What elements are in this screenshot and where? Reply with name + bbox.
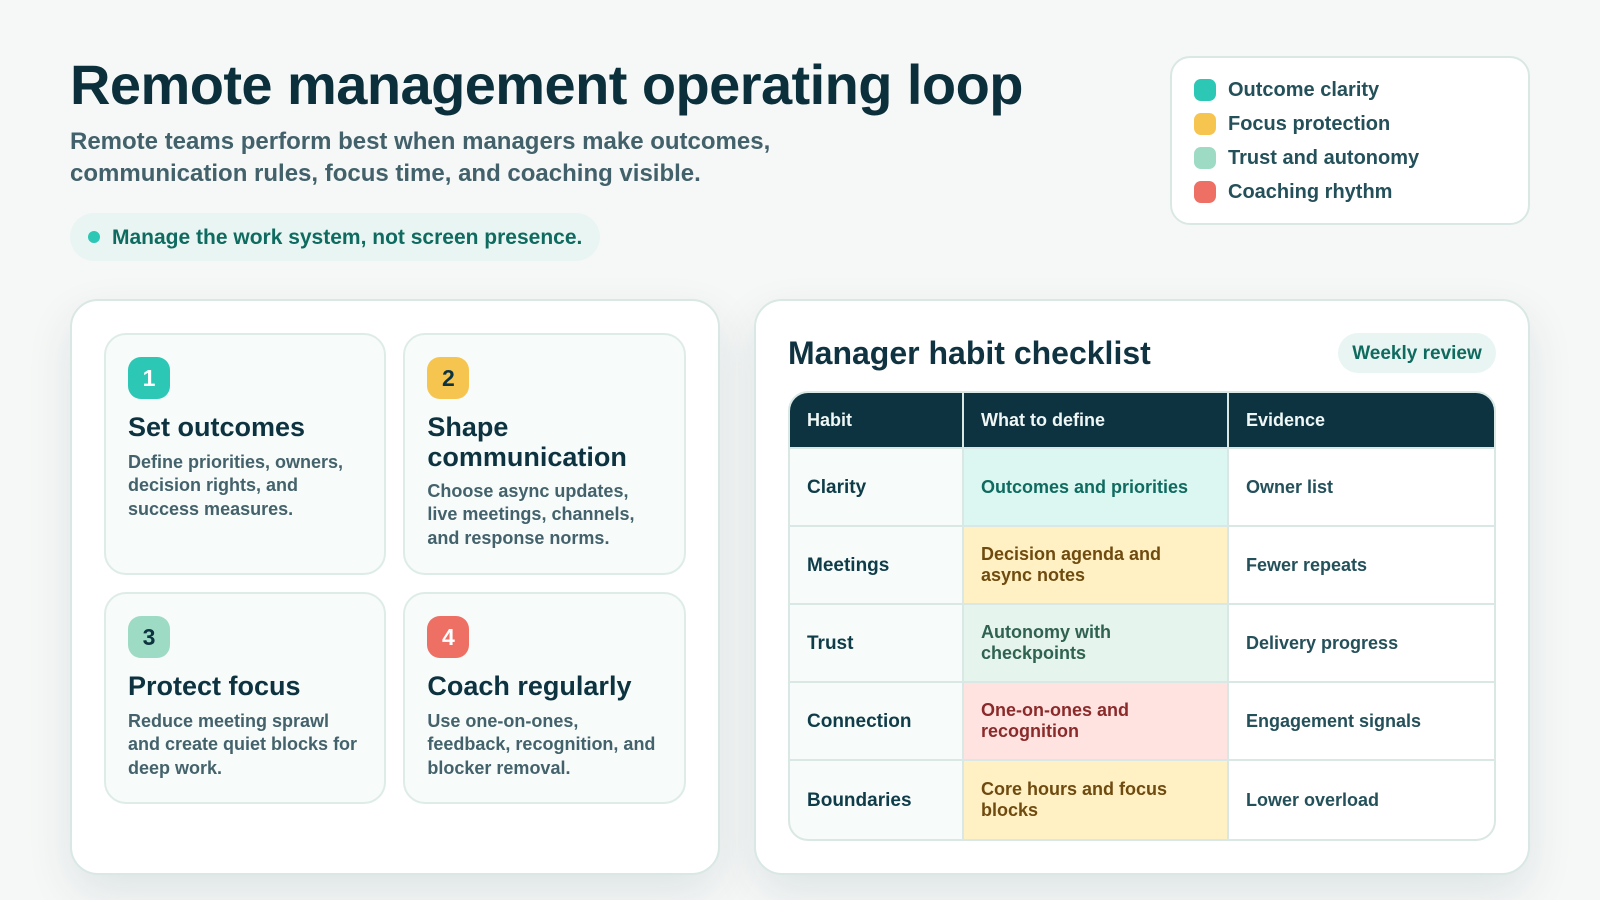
panel: operating loop steps [70, 299, 720, 874]
step description: Define priorities, owners, [128, 452, 343, 472]
row connection: define: One-on-ones and [981, 700, 1129, 720]
row trust: habit [790, 605, 962, 681]
panel: manager habit checklist [754, 299, 1530, 874]
row trust: evidence [1229, 605, 1494, 681]
step description: Choose async updates, [427, 481, 628, 501]
row boundaries: evidence: Lower overload [1246, 790, 1379, 810]
row connection: habit: Connection [807, 710, 912, 732]
step description: success measures. [128, 499, 293, 519]
step heading: Coach regularly [427, 671, 631, 701]
step description: deep work. [128, 758, 222, 778]
subtitle: Remote teams perform best when managers make outcomes, [70, 128, 770, 155]
callout dot [88, 231, 100, 243]
step heading: communication [427, 442, 627, 472]
row boundaries: habit [790, 761, 962, 839]
step description: blocker removal. [427, 758, 570, 778]
row clarity: evidence: Owner list [1246, 476, 1333, 496]
legend swatch: coaching rhythm [1194, 181, 1216, 203]
weekly review pill: Weekly review [1352, 343, 1482, 364]
callout pill [70, 213, 600, 261]
badge 3: 3 [143, 624, 155, 650]
table header: habit: Habit [807, 410, 852, 430]
row boundaries: define: blocks [981, 800, 1038, 820]
row meetings: habit [790, 527, 962, 603]
row clarity: habit [790, 449, 962, 525]
step description [128, 452, 343, 519]
row meetings: evidence: Fewer repeats [1246, 554, 1367, 574]
row boundaries: define: Core hours and focus [981, 779, 1167, 799]
step description: and response norms. [427, 528, 609, 548]
row trust: define: checkpoints [981, 643, 1086, 663]
badge 3 [128, 616, 170, 658]
badge 2: 2 [442, 365, 455, 391]
step description: live meetings, channels, [427, 504, 634, 524]
badge 1 [128, 357, 170, 399]
row meetings: evidence [1229, 527, 1494, 603]
step card 2 [403, 333, 686, 575]
step card 1 [104, 333, 386, 575]
step description: Use one-on-ones, [427, 711, 578, 731]
checklist heading: Manager habit checklist [788, 335, 1151, 371]
table header: what to define [964, 393, 1227, 447]
row connection: habit [790, 683, 962, 759]
row trust: define: Autonomy with [981, 622, 1111, 642]
row trust: evidence: Delivery progress [1246, 632, 1398, 652]
row connection: define: recognition [981, 721, 1079, 741]
legend label: coaching rhythm: Coaching rhythm [1228, 181, 1392, 203]
step description [427, 711, 655, 778]
title: Remote management operating loop [70, 53, 1023, 116]
badge 2 [427, 357, 469, 399]
step description: feedback, recognition, and [427, 734, 655, 754]
step heading: Protect focus [128, 671, 301, 701]
legend [1170, 56, 1530, 225]
step heading [427, 412, 627, 472]
row connection: evidence: Engagement signals [1246, 710, 1421, 730]
row boundaries: define [964, 761, 1227, 839]
habit table [788, 391, 1496, 841]
legend label: focus protection: Focus protection [1228, 113, 1390, 135]
row clarity: habit: Clarity [807, 476, 866, 498]
row meetings: define: async notes [981, 565, 1085, 585]
subtitle [70, 128, 770, 187]
row trust: habit: Trust [807, 632, 853, 654]
step card 4 [403, 592, 686, 804]
row meetings: define [964, 527, 1227, 603]
step description: and create quiet blocks for [128, 734, 357, 754]
step description [128, 711, 357, 778]
step heading: Shape [427, 412, 508, 442]
row connection: define [964, 683, 1227, 759]
row trust: define [964, 605, 1227, 681]
callout text: Manage the work system, not screen presence. [112, 226, 582, 249]
legend swatch: outcome clarity [1194, 79, 1216, 101]
row clarity: define: Outcomes and priorities [981, 476, 1188, 496]
legend label: trust and autonomy: Trust and autonomy [1228, 147, 1419, 169]
row boundaries: habit: Boundaries [807, 790, 912, 810]
row clarity: evidence [1229, 449, 1494, 525]
legend label: outcome clarity: Outcome clarity [1228, 79, 1379, 101]
table header: what to define: What to define [981, 410, 1105, 430]
subtitle: communication rules, focus time, and coaching visible. [70, 160, 701, 187]
legend swatch: focus protection [1194, 113, 1216, 135]
row connection: evidence [1229, 683, 1494, 759]
row boundaries: evidence [1229, 761, 1494, 839]
table header: habit [790, 393, 962, 447]
step heading: Set outcomes [128, 412, 305, 442]
row clarity: define [964, 449, 1227, 525]
step description: decision rights, and [128, 475, 298, 495]
step card 3 [104, 592, 386, 804]
step description: Reduce meeting sprawl [128, 711, 329, 731]
badge 1: 1 [143, 365, 155, 391]
badge 4 [427, 616, 469, 658]
step description [427, 481, 634, 548]
table header: evidence: Evidence [1246, 410, 1325, 430]
row meetings: habit: Meetings [807, 554, 889, 576]
legend swatch: trust and autonomy [1194, 147, 1216, 169]
table header: evidence [1229, 393, 1494, 447]
badge 4: 4 [442, 624, 455, 650]
row meetings: define: Decision agenda and [981, 544, 1161, 564]
weekly review pill [1338, 333, 1496, 373]
